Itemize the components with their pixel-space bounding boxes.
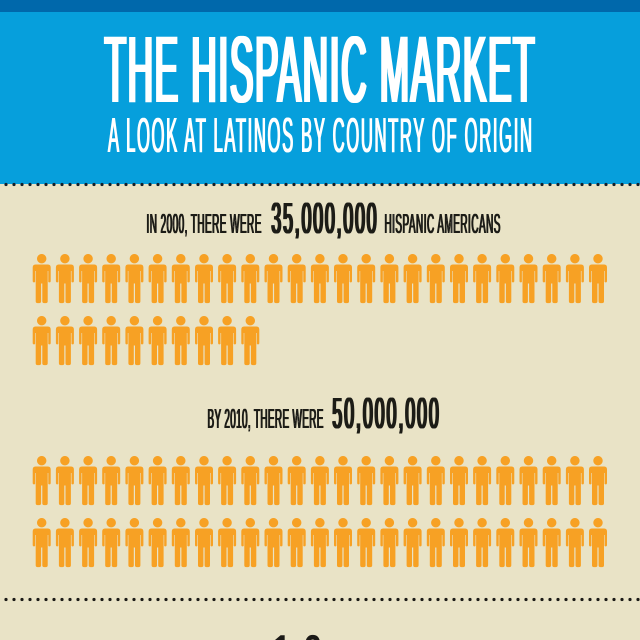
header band: [0, 0, 640, 184]
pictogram: 50 million people: [33, 456, 607, 567]
heading: 2010 population: [208, 390, 439, 439]
heading: 2010 population: BY 2010, THERE WERE: [208, 404, 323, 435]
pictogram: 35 million people: [33, 254, 607, 365]
heading: 2000 population: HISPANIC AMERICANS: [384, 209, 500, 240]
subtitle: A LOOK AT LATINOS BY COUNTRY OF ORIGIN: [108, 108, 532, 163]
heading: 2000 population: [146, 195, 500, 244]
title: THE HISPANIC MARKET: [105, 18, 535, 123]
heading: 2000 population: 35,000,000: [271, 195, 377, 244]
heading: 2000 population: IN 2000, THERE WERE: [146, 209, 261, 240]
heading: cropped figures at bottom edge: [273, 626, 322, 640]
heading: 2010 population: 50,000,000: [332, 390, 439, 439]
